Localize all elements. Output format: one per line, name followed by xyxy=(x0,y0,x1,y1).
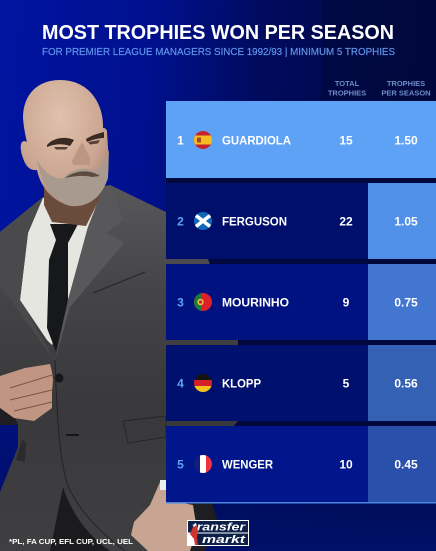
title: MOST TROPHIES WON PER SEASON xyxy=(42,22,394,44)
table row 5: Wenger: 0.45 xyxy=(394,458,418,472)
jacket button xyxy=(54,374,64,382)
column header: total trophies: TROPHIES xyxy=(328,88,366,98)
trousers xyxy=(50,487,110,551)
table row 1: Guardiola: 1.50 xyxy=(394,134,418,148)
table row 4: Klopp: 4 xyxy=(177,376,184,390)
column header: total trophies: TOTAL xyxy=(335,79,360,88)
table row 3: Mourinho xyxy=(166,264,436,340)
hand on hip xyxy=(131,482,197,551)
neck xyxy=(44,184,100,226)
flag: Germany xyxy=(194,374,212,392)
logo: Transfermarkt: markt xyxy=(202,534,247,546)
table row 5: Wenger xyxy=(166,426,436,504)
table row 1: Guardiola: 1 xyxy=(177,134,184,148)
table row 3: Mourinho: 0.75 xyxy=(394,296,418,310)
button hole xyxy=(66,434,79,436)
logo: Transfermarkt: transfer xyxy=(192,522,246,534)
side pocket xyxy=(16,440,26,462)
flag: Scotland xyxy=(194,212,212,230)
table row 1: Guardiola: GUARDIOLA xyxy=(222,134,291,148)
table row 1: Guardiola xyxy=(166,101,436,178)
table row 3: Mourinho: MOURINHO xyxy=(222,296,289,310)
photo: manager in grey suit xyxy=(0,80,238,551)
beard xyxy=(37,150,109,206)
table row 4: Klopp: 0.56 xyxy=(394,376,418,390)
chest pocket xyxy=(93,272,145,293)
flag: France xyxy=(194,455,212,473)
table row 2: Ferguson xyxy=(166,183,436,259)
footnote: *PL, FA CUP, EFL CUP, UCL, UEL xyxy=(9,537,133,546)
flag: Spain xyxy=(194,131,212,149)
table row 4: Klopp: 5 xyxy=(343,376,350,390)
shirt xyxy=(20,196,100,345)
jacket body xyxy=(0,185,238,551)
finger lines xyxy=(10,375,52,411)
column header: trophies per season xyxy=(381,79,431,98)
lapels xyxy=(55,185,124,360)
pocket flap xyxy=(123,416,166,443)
table row 1: Guardiola: 15 xyxy=(339,134,353,148)
column header: total trophies xyxy=(328,79,366,98)
head xyxy=(21,80,109,206)
subtitle: FOR PREMIER LEAGUE MANAGERS SINCE 1992/93 | MINIMUM 5 TROPHIES xyxy=(42,46,395,58)
table row 2: Ferguson: 22 xyxy=(339,214,353,228)
logo: Transfermarkt xyxy=(187,520,249,546)
table row 4: Klopp: KLOPP xyxy=(222,376,261,390)
table row 5: Wenger: WENGER xyxy=(222,458,273,472)
jacket front edge xyxy=(55,360,125,551)
table row 3: Mourinho: 9 xyxy=(343,296,350,310)
table row 2: Ferguson: 2 xyxy=(177,214,184,228)
table row 5: Wenger: 10 xyxy=(339,458,353,472)
table row 2: Ferguson: 1.05 xyxy=(394,214,418,228)
flag: Portugal xyxy=(194,293,212,311)
brows, eyes and mouth xyxy=(47,132,104,178)
table row 4: Klopp xyxy=(166,345,436,421)
hand on button xyxy=(0,364,53,421)
table row 2: Ferguson: FERGUSON xyxy=(222,214,287,228)
dark strip by hip xyxy=(190,503,218,551)
sleeve behind body xyxy=(0,328,20,425)
table row 3: Mourinho: 3 xyxy=(177,296,184,310)
column header: trophies per season: TROPHIES xyxy=(387,79,425,88)
table row 5: Wenger: 5 xyxy=(177,458,184,472)
column header: trophies per season: PER SEASON xyxy=(381,88,431,98)
tie xyxy=(47,224,78,352)
